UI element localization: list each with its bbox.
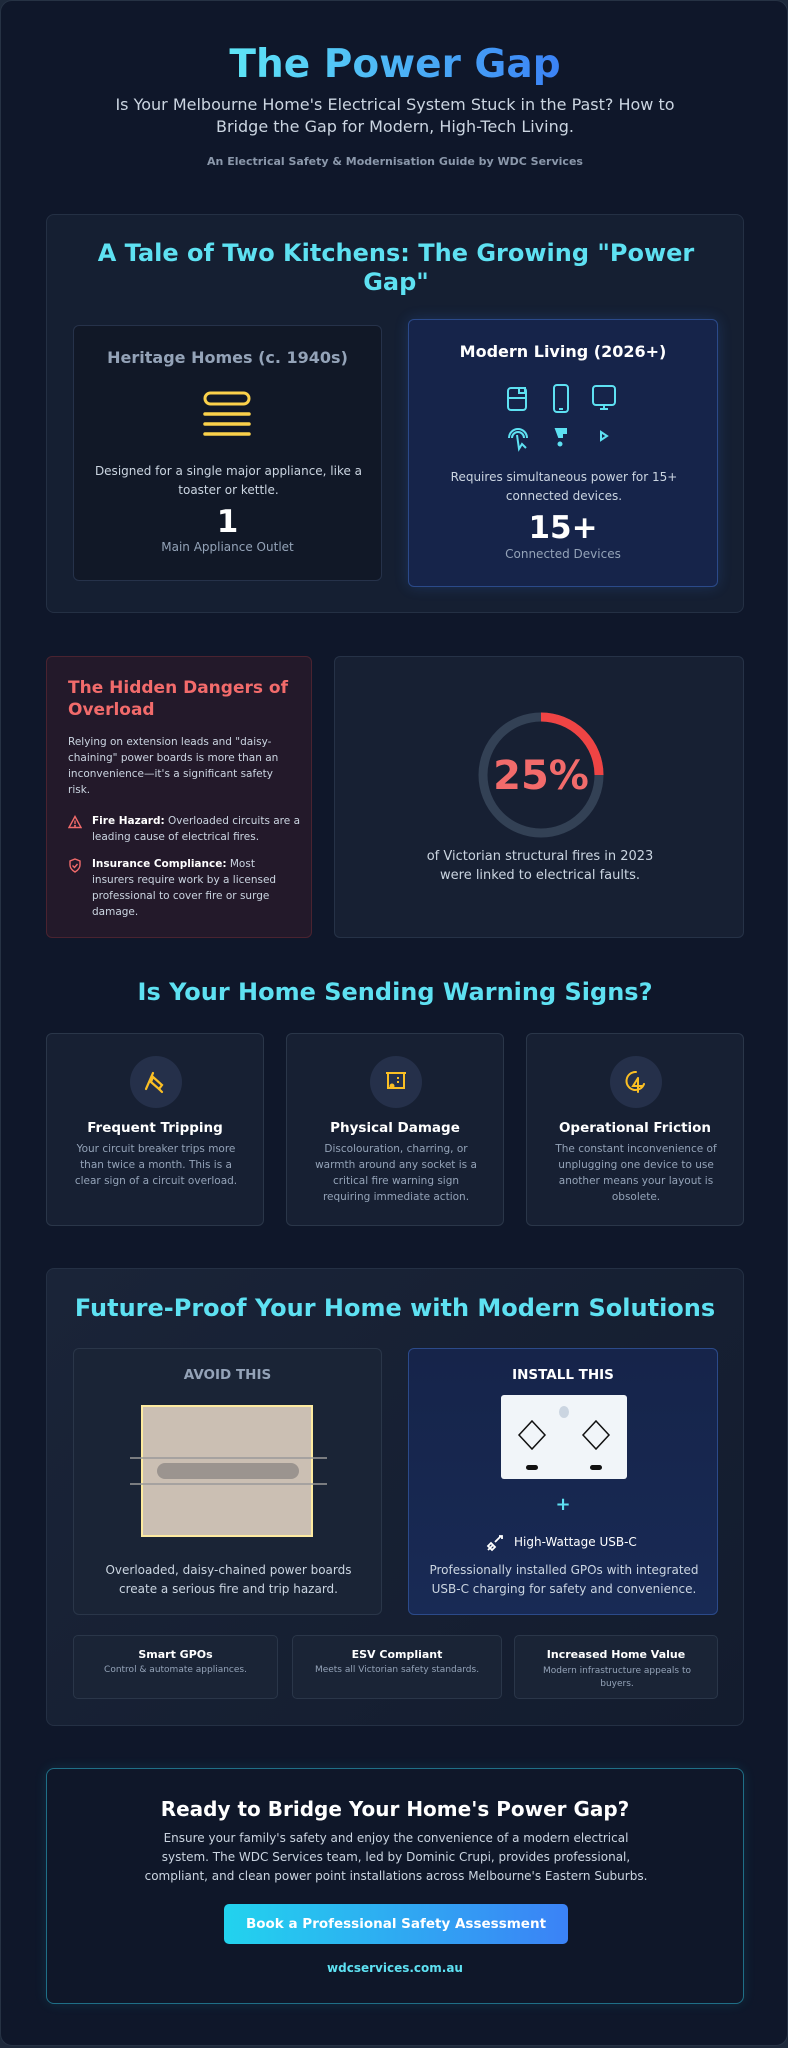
panel: future-proof xyxy=(46,1268,744,1726)
text: CTA body: Ensure your family's safety and enjoy the convenience of a modern electrical system. The WDC Services team, led by Dominic Crupi, provides professional, compliant, and clean power point installations across Melbourne's Eastern Suburbs. xyxy=(145,1831,647,1883)
card: frequent tripping xyxy=(46,1033,264,1226)
label: usb-c xyxy=(486,1535,637,1552)
title: frequent tripping: Frequent Tripping xyxy=(87,1120,223,1136)
text: plus: + xyxy=(555,1494,571,1515)
illustration: power board xyxy=(130,1405,327,1537)
card: smart GPOs: Smart GPOs xyxy=(138,1648,213,1661)
text: dangers intro: Relying on extension leads and "daisy-chaining" power boards is more than an inconvenience—it's a significant safety risk. xyxy=(68,736,278,796)
title: operational friction: Operational Friction xyxy=(559,1120,711,1136)
text: install desc: Professionally installed GPOs with integrated USB-C charging for safety and convenience. xyxy=(429,1563,699,1596)
stat: 15+: 15+ xyxy=(528,510,598,546)
icon: damage xyxy=(370,1056,422,1108)
card: ESV compliant: Meets all Victorian safety standards. xyxy=(315,1665,479,1675)
item: fire hazard: Fire Hazard: Overloaded circuits are a leading cause of electrical fires. xyxy=(92,815,300,843)
card: heritage homes xyxy=(73,325,382,581)
icon: friction xyxy=(610,1056,662,1108)
card: physical damage xyxy=(286,1033,504,1226)
card: home value: Increased Home Value xyxy=(547,1648,685,1661)
title: The Power Gap xyxy=(229,42,561,87)
panel: CTA xyxy=(46,1768,744,2004)
card: smart GPOs: Control & automate appliances. xyxy=(104,1665,247,1675)
panel: 25% stat xyxy=(334,656,744,938)
card: smart GPOs xyxy=(73,1635,278,1699)
icon: warning xyxy=(68,815,82,828)
card: install this xyxy=(408,1348,718,1615)
chart: 25% donut xyxy=(478,712,604,838)
byline: An Electrical Safety & Modernisation Guide by WDC Services xyxy=(207,155,583,168)
card: ESV compliant: ESV Compliant xyxy=(352,1648,442,1661)
icon: tripping xyxy=(130,1056,182,1108)
icon: toaster xyxy=(203,392,251,436)
text: Discolouration, charring, or warmth around any socket is a critical fire warning sign requiring immediate action. xyxy=(315,1143,477,1203)
label: connected devices: Connected Devices xyxy=(505,547,621,561)
text: modern desc: Requires simultaneous power for 15+ connected devices. xyxy=(451,470,677,503)
panel: tale of two kitchens xyxy=(46,214,744,613)
item: insurance: Insurance Compliance: Most insurers require work by a licensed professional to cover fire or surge damage. xyxy=(92,858,276,918)
subtitle: Is Your Melbourne Home's Electrical System Stuck in the Past? How to Bridge the Gap for Modern, High-Tech Living. xyxy=(115,95,675,136)
card: avoid this xyxy=(73,1348,382,1615)
title: physical damage: Physical Damage xyxy=(330,1120,460,1136)
stat: 1: 1 xyxy=(217,504,238,540)
heading: hidden dangers: The Hidden Dangers of Overload xyxy=(68,678,288,720)
heading: CTA: Ready to Bridge Your Home's Power Gap? xyxy=(161,1797,629,1821)
card: operational friction xyxy=(526,1033,744,1226)
label: install this: INSTALL THIS xyxy=(512,1367,614,1383)
link: website: wdcservices.com.au xyxy=(327,1961,463,1975)
card: ESV compliant xyxy=(292,1635,502,1699)
label: usb-c: High-Wattage USB-C xyxy=(514,1535,637,1549)
text: heritage desc: Designed for a single major appliance, like a toaster or kettle. xyxy=(95,464,362,497)
heading: warning signs: Is Your Home Sending Warning Signs? xyxy=(138,978,652,1006)
button: book assessment xyxy=(224,1904,568,1944)
chart: 25% donut: 25% xyxy=(493,753,589,799)
panel: hidden dangers xyxy=(46,656,312,938)
heading: tale of two kitchens: A Tale of Two Kitchens: The Growing "Power Gap" xyxy=(98,239,694,296)
text: avoid desc: Overloaded, daisy-chained power boards create a serious fire and trip hazard. xyxy=(105,1563,352,1596)
button: book assessment: Book a Professional Safety Assessment xyxy=(246,1916,546,1932)
illustration: GPO xyxy=(501,1395,627,1479)
icons: devices xyxy=(507,384,616,452)
text: stat caption: of Victorian structural fires in 2023 were linked to electrical faults. xyxy=(427,849,653,883)
card: modern living xyxy=(408,319,718,587)
heading: future-proof: Future-Proof Your Home with Modern Solutions xyxy=(75,1294,715,1322)
card: home value: Modern infrastructure appeals to buyers. xyxy=(543,1666,691,1689)
card: home value xyxy=(514,1635,718,1699)
label: main appliance outlet: Main Appliance Outlet xyxy=(161,540,294,554)
text: The constant inconvenience of unplugging one device to use another means your layout is obsolete. xyxy=(555,1143,717,1203)
label: avoid this: AVOID THIS xyxy=(184,1367,271,1383)
heading: modern: Modern Living (2026+) xyxy=(460,342,666,361)
heading: heritage: Heritage Homes (c. 1940s) xyxy=(107,348,348,367)
icon: shield xyxy=(69,858,81,873)
icon: plug xyxy=(486,1535,503,1552)
text: Your circuit breaker trips more than twice a month. This is a clear sign of a circuit overload. xyxy=(75,1143,237,1187)
